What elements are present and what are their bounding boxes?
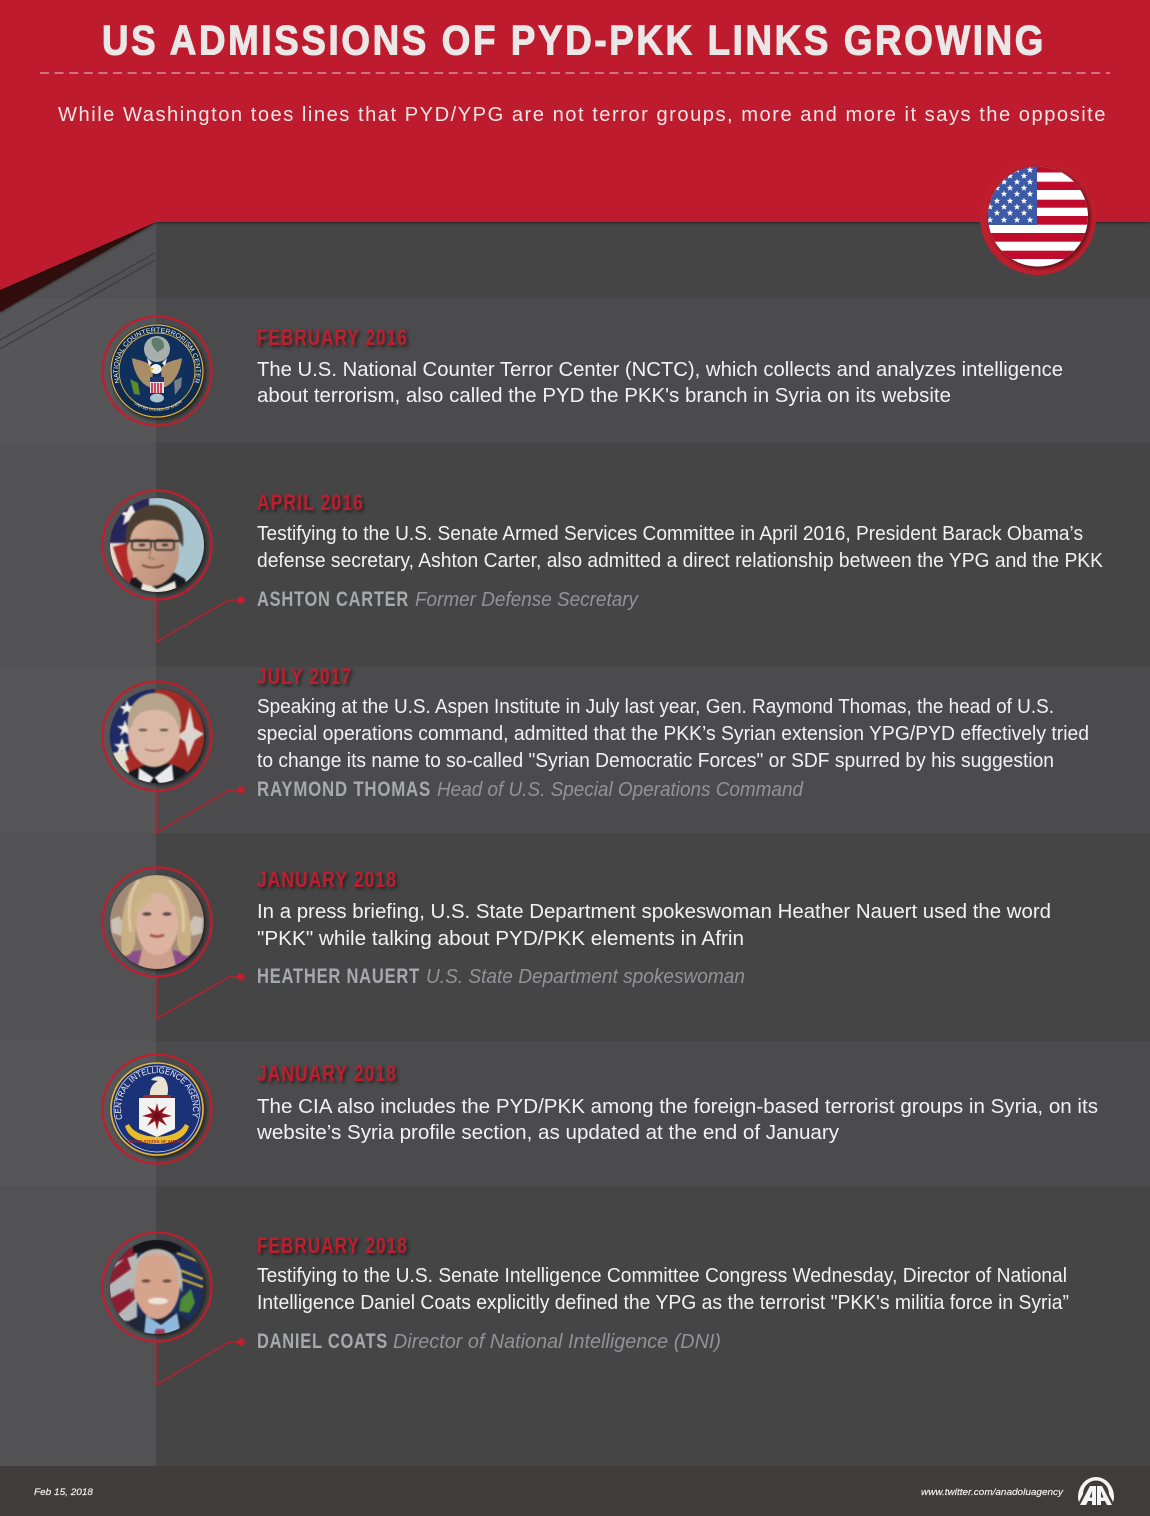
entry: April 2016 Ashton Carter: [102, 490, 1104, 642]
left column: [0, 222, 156, 1466]
panel band: July 2017: [156, 667, 1150, 833]
icon: NCTC seal: UNITED STATES OF AMERICA: [134, 400, 182, 412]
title: US ADMISSIONS OF PYD-PKK LINKS GROWING: [102, 16, 1046, 64]
date: JANUARY 2018: [257, 1061, 397, 1086]
text block: [257, 1265, 1069, 1314]
text block: [257, 523, 1104, 572]
icon: Anadolu Agency logo: [1078, 1477, 1114, 1505]
text block: [256, 1096, 1098, 1144]
person name: RAYMOND THOMAS: [257, 777, 431, 801]
text block: Testifying to the U.S. Senate Intelligence Committee Congress Wednesday, Director of National: [257, 1265, 1067, 1287]
subtitle: While Washington toes lines that PYD/YPG are not terror groups, more and more it says the opposite: [58, 104, 1107, 126]
connector: [156, 973, 245, 1019]
date: JANUARY 2018: [257, 867, 397, 892]
entry: February 2016 NCTC: [101, 315, 1063, 427]
text block: [257, 696, 1089, 772]
text block: In a press briefing, U.S. State Department spokeswoman Heather Nauert used the word: [257, 901, 1051, 923]
icon: CIA seal: [101, 1053, 213, 1165]
text block: "PKK" while talking about PYD/PKK elements in Afrin: [257, 928, 744, 950]
connector: [156, 786, 245, 833]
icon: portrait of Raymond Thomas: [102, 682, 212, 790]
icon: NCTC seal: NATIONAL COUNTERTERRORISM CENTER: [113, 328, 201, 384]
panel band: February 2016: [156, 298, 1150, 443]
date: APRIL 2016: [257, 490, 364, 515]
icon: US flag badge: [980, 159, 1096, 275]
dark wedge under header: [0, 222, 156, 312]
red header: [0, 0, 1150, 290]
entry: January 2018 Heather Nauert: [102, 867, 1051, 1019]
text block: defense secretary, Ashton Carter, also admitted a direct relationship between the YPG and the PKK: [257, 550, 1104, 572]
person name: DANIEL COATS: [257, 1329, 388, 1353]
entry: January 2018 CIA: [101, 1053, 1098, 1165]
text block: The CIA also includes the PYD/PKK among the foreign-based terrorist groups in Syria, on its: [257, 1096, 1098, 1118]
text block: Intelligence Daniel Coats explicitly defined the YPG as the terrorist "PKK's militia force in Syria”: [257, 1292, 1069, 1314]
footer date: Feb 15, 2018: [34, 1487, 94, 1498]
text block: The U.S. National Counter Terror Center (NCTC), which collects and analyzes intelligence: [257, 359, 1063, 381]
dashed divider: [40, 72, 1110, 74]
icon: portrait of Daniel Coats: [102, 1232, 212, 1342]
person role: Former Defense Secretary: [415, 588, 640, 611]
date: JULY 2017: [257, 664, 352, 689]
text block: special operations command, admitted that the PKK’s Syrian extension YPG/PYD effectively tried: [257, 723, 1089, 745]
person name: HEATHER NAUERT: [257, 964, 420, 988]
person role: U.S. State Department spokeswoman: [426, 965, 745, 988]
icon: portrait of Heather Nauert: [102, 868, 212, 976]
date: FEBRUARY 2018: [257, 1233, 408, 1258]
panel band: January 2018 CIA: [156, 1041, 1150, 1186]
text block: Speaking at the U.S. Aspen Institute in July last year, Gen. Raymond Thomas, the head of U.S.: [257, 696, 1054, 718]
date: FEBRUARY 2016: [257, 325, 408, 350]
entry: July 2017 Raymond Thomas: [102, 664, 1089, 833]
text block: about terrorism, also called the PYD the PKK's branch in Syria on its website: [257, 385, 951, 407]
icon: CIA seal: CENTRAL INTELLIGENCE AGENCY: [115, 1067, 199, 1120]
person role: Head of U.S. Special Operations Command: [437, 778, 804, 801]
icon: CIA seal: UNITED STATES OF AMERICA: [127, 1139, 187, 1144]
text block: [257, 901, 1051, 950]
connector: [156, 596, 245, 642]
person name: ASHTON CARTER: [257, 587, 409, 611]
footer: [0, 1466, 1150, 1516]
person role: Director of National Intelligence (DNI): [393, 1330, 721, 1353]
footer link: www.twitter.com/anadoluagency: [921, 1487, 1064, 1498]
icon: portrait of Ashton Carter: [102, 490, 212, 600]
text block: to change its name to so-called "Syrian Democratic Forces" or SDF spurred by his suggestion: [257, 750, 1054, 772]
text block: website’s Syria profile section, as updated at the end of January: [256, 1122, 839, 1144]
icon: NCTC seal: [101, 315, 213, 427]
entry: February 2018 Daniel Coats: [102, 1232, 1069, 1385]
text block: [257, 359, 1063, 407]
connector: [156, 1338, 245, 1385]
text block: Testifying to the U.S. Senate Armed Services Committee in April 2016, President Barack Obama’s: [257, 523, 1083, 545]
